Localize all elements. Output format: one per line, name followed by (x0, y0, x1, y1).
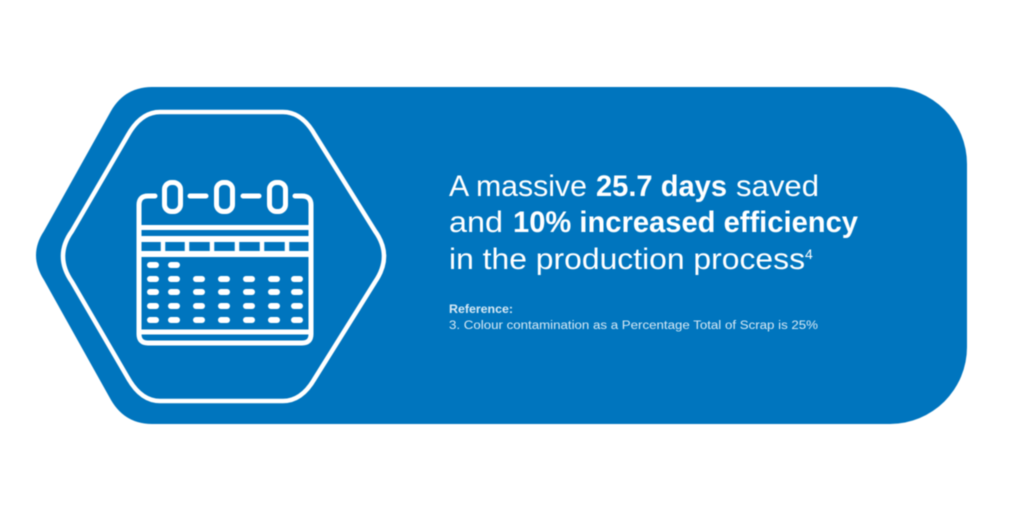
icon: calendar (139, 182, 311, 343)
heading: main statement: in the production process (449, 243, 805, 276)
reference note (449, 304, 818, 332)
calendar day dots (147, 262, 303, 323)
heading: main statement (449, 170, 858, 276)
heading: main statement: and (449, 206, 503, 239)
heading: main statement: A massive (449, 170, 587, 203)
reference note: 3. Colour contamination as a Percentage Total of Scrap is 25% (449, 320, 818, 332)
heading: main statement: 25.7 days (596, 170, 727, 203)
reference note: Reference: (449, 304, 513, 316)
heading: main statement: 10% increased efficiency (513, 206, 858, 239)
panel: blue hexagon-ended banner (36, 87, 967, 424)
heading: main statement: 4 (805, 246, 813, 262)
heading: main statement: saved (736, 170, 819, 203)
icon: hexagon outline (63, 112, 384, 401)
